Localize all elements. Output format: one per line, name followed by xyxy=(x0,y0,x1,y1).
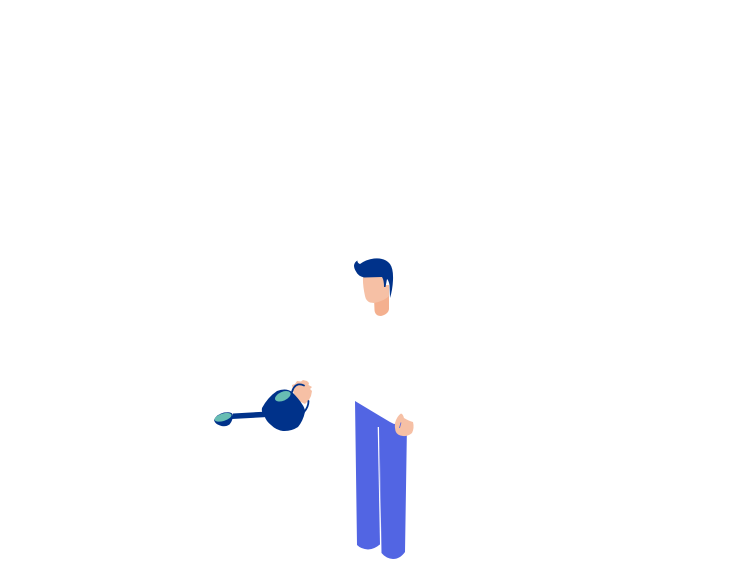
can handle xyxy=(292,384,308,412)
holding hand xyxy=(292,380,312,404)
hair xyxy=(354,258,393,298)
leg gap xyxy=(378,427,381,553)
right leg xyxy=(378,424,407,559)
can body xyxy=(262,389,305,431)
can opening xyxy=(273,389,292,404)
hand xyxy=(395,414,414,436)
left leg xyxy=(355,401,407,550)
trousers xyxy=(355,401,407,559)
figure: person xyxy=(354,258,414,559)
rose opening xyxy=(214,411,232,423)
icon: watering can xyxy=(214,380,312,431)
face xyxy=(363,276,389,303)
thumb line xyxy=(400,422,401,428)
spout xyxy=(232,412,268,419)
rose xyxy=(214,412,233,426)
neck xyxy=(374,292,389,316)
